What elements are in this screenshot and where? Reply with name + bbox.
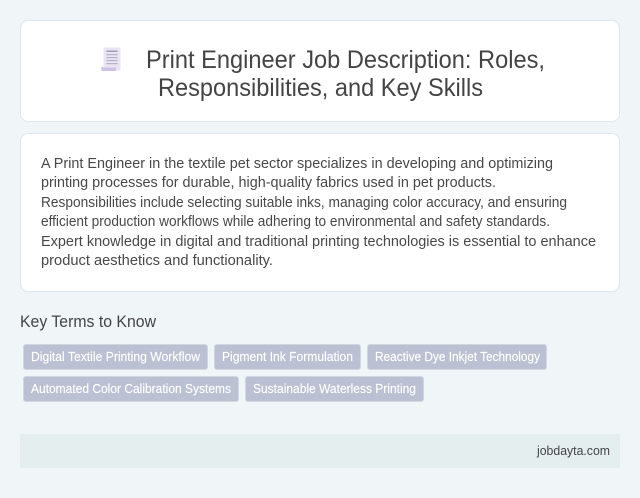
title: Responsibilities, and Key Skills xyxy=(158,74,483,102)
text block: description: efficient production workflows while adhering to environmental and safety standards. xyxy=(41,214,550,230)
text block: description: printing processes for durable, high-quality fabrics used in pet products. xyxy=(41,175,496,191)
tag: sustainable waterless printing xyxy=(245,376,424,402)
tag labels: Reactive Dye Inkjet Technology xyxy=(375,349,540,364)
text block: description: Responsibilities include selecting suitable inks, managing color accuracy, and ensuring xyxy=(41,195,567,211)
panel: title card xyxy=(20,20,620,122)
tag labels: Digital Textile Printing Workflow xyxy=(31,349,201,364)
title: Print Engineer Job Description: Roles, xyxy=(146,46,545,74)
heading: key terms: Key Terms to Know xyxy=(20,312,157,331)
tag: pigment ink formulation xyxy=(214,344,361,370)
tag: digital textile printing workflow xyxy=(23,344,208,370)
footer bar xyxy=(20,434,620,468)
text block: description: Expert knowledge in digital and traditional printing technologies is essential to enhance xyxy=(41,234,596,250)
tag labels: Sustainable Waterless Printing xyxy=(253,381,416,396)
footer text: jobdayta.com: jobdayta.com xyxy=(536,443,610,458)
tag labels: Automated Color Calibration Systems xyxy=(31,381,231,396)
panel: description card xyxy=(20,133,620,292)
tag: reactive dye inkjet technology xyxy=(367,344,547,370)
tag labels: Pigment Ink Formulation xyxy=(222,349,353,364)
text block: description: A Print Engineer in the textile pet sector specializes in developing and optimizing xyxy=(41,156,553,172)
tag: automated color calibration systems xyxy=(23,376,239,402)
text block: description: product aesthetics and functionality. xyxy=(41,253,273,269)
